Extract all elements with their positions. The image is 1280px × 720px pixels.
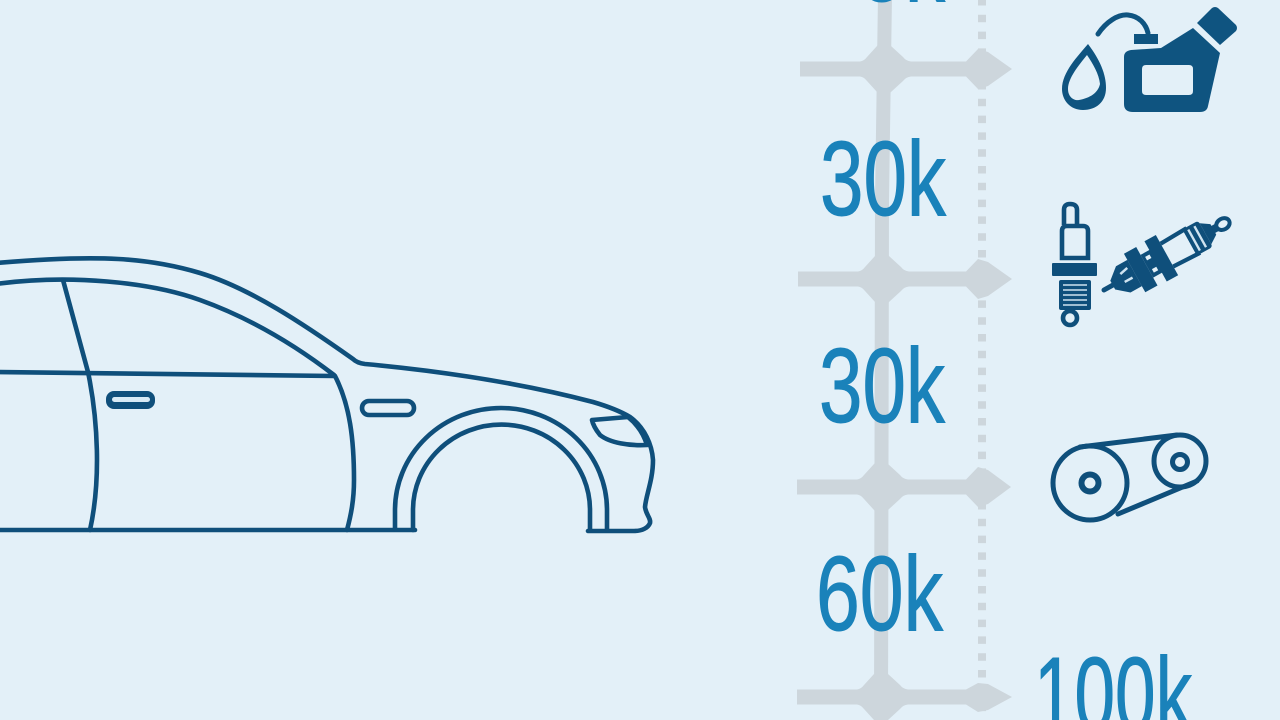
side marker [362,401,414,415]
interval label: 30k second: 30k [819,327,946,445]
interval label: 60k: 60k [816,535,944,653]
timeline marker 3 [797,461,1011,513]
interval label: 30k first: 30k [820,120,947,238]
inner roof line [0,280,334,375]
dotted vertical line [978,0,986,720]
jug cap [1197,7,1237,45]
door handle [106,391,155,409]
tilted spark plug [1093,201,1240,310]
belt bottom run [1118,481,1197,514]
vertical axis [874,0,892,720]
front door edge [335,376,354,530]
timeline marker 1 [800,43,1012,95]
jug spout [1134,34,1158,44]
timeline marker 4 [797,671,1012,720]
timeline axis [797,0,1012,720]
icon: timing belt and pulleys [1053,435,1206,520]
belt top run [1080,435,1177,447]
oil hose [1098,15,1148,34]
large pulley [1053,446,1127,520]
icon: spark plugs [1052,201,1240,325]
icon: oil drop and jug [1062,7,1237,112]
upright spark plug [1052,204,1097,325]
belt line [0,372,334,376]
jug body [1124,28,1220,112]
car roof and hood outline [0,258,653,531]
outer wheel arch [395,408,607,529]
rear door pillar [63,280,97,530]
large pulley hub [1082,474,1098,492]
small pulley hub [1172,454,1188,470]
small pulley [1154,435,1206,487]
oil drop [1062,44,1106,110]
car outline [0,258,653,531]
inner wheel arch [413,425,590,530]
headlight [592,417,647,445]
sill line [0,528,415,532]
timeline marker 2 [798,253,1012,305]
